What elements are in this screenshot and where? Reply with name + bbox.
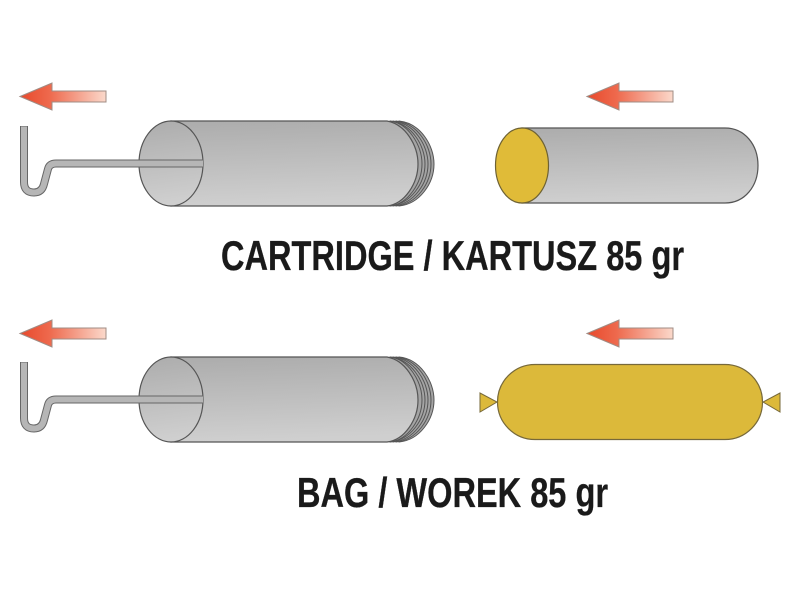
arrow: top right xyxy=(587,83,673,110)
arrow: bottom left xyxy=(20,320,106,347)
arrow: top left xyxy=(20,83,106,110)
right bag tip xyxy=(763,393,780,412)
tool: cartridge gun with hook xyxy=(24,121,434,206)
tool: bag gun with hook xyxy=(24,357,434,442)
cartridge cylinder xyxy=(496,128,758,203)
left bag tip xyxy=(480,393,497,412)
sausage bag xyxy=(480,364,780,440)
arrow: bottom right xyxy=(587,320,673,347)
heading: bag: BAG / WOREK 85 gr xyxy=(297,469,608,516)
bag body xyxy=(498,364,762,440)
cartridge yellow end xyxy=(496,128,548,203)
